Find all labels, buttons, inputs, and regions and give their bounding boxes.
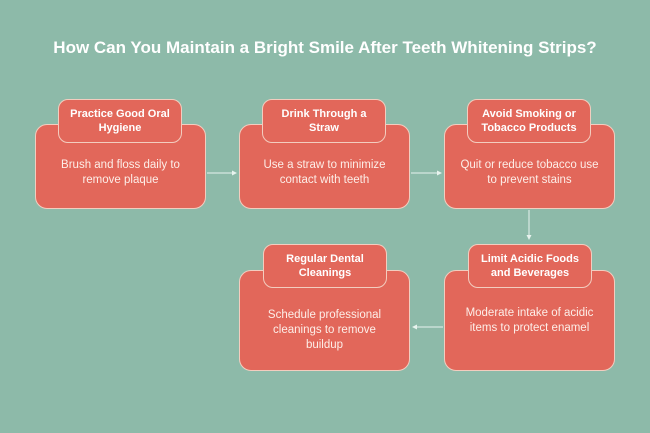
card: cleanings <box>239 244 410 371</box>
card heading: Drink Through a <box>282 108 366 120</box>
card: straw <box>239 99 410 209</box>
card: oral hygiene <box>35 99 206 209</box>
card body <box>444 124 615 209</box>
card heading: Practice Good Oral <box>70 108 170 120</box>
card heading <box>58 99 182 143</box>
card heading <box>468 244 592 288</box>
card body: Use a straw to minimize <box>263 159 386 171</box>
arrow 1 to 2 <box>207 170 237 176</box>
card body: buildup <box>306 339 343 351</box>
card heading: Tobacco Products <box>481 122 577 134</box>
card heading: and Beverages <box>491 267 569 279</box>
card heading: Regular Dental <box>286 253 364 265</box>
card: smoking <box>444 99 615 209</box>
card body: Schedule professional <box>268 309 381 321</box>
card heading: Cleanings <box>299 267 351 279</box>
card body: Moderate intake of acidic <box>466 307 593 319</box>
card heading <box>263 244 387 288</box>
arrow 3 to 4 <box>526 210 532 240</box>
card body <box>35 124 206 209</box>
card heading: Hygiene <box>99 122 141 134</box>
card body: contact with teeth <box>280 174 369 186</box>
card body: to prevent stains <box>487 174 572 186</box>
title: How Can You Maintain a Bright Smile After Teeth Whitening Strips? <box>53 38 597 57</box>
card body <box>239 124 410 209</box>
card body: Brush and floss daily to <box>61 159 180 171</box>
card body <box>444 270 615 371</box>
card body: items to protect enamel <box>470 322 589 334</box>
card heading: Straw <box>309 122 339 134</box>
card heading: Avoid Smoking or <box>482 108 576 120</box>
arrow 2 to 3 <box>411 170 442 176</box>
card body <box>239 270 410 371</box>
card heading <box>467 99 591 143</box>
arrow 4 to 5 <box>412 324 443 330</box>
card heading: Limit Acidic Foods <box>481 253 579 265</box>
card heading <box>262 99 386 143</box>
card body: Quit or reduce tobacco use <box>460 159 599 171</box>
card: acidic <box>444 244 615 371</box>
card body: remove plaque <box>82 174 159 186</box>
card body: cleanings to remove <box>273 324 376 336</box>
